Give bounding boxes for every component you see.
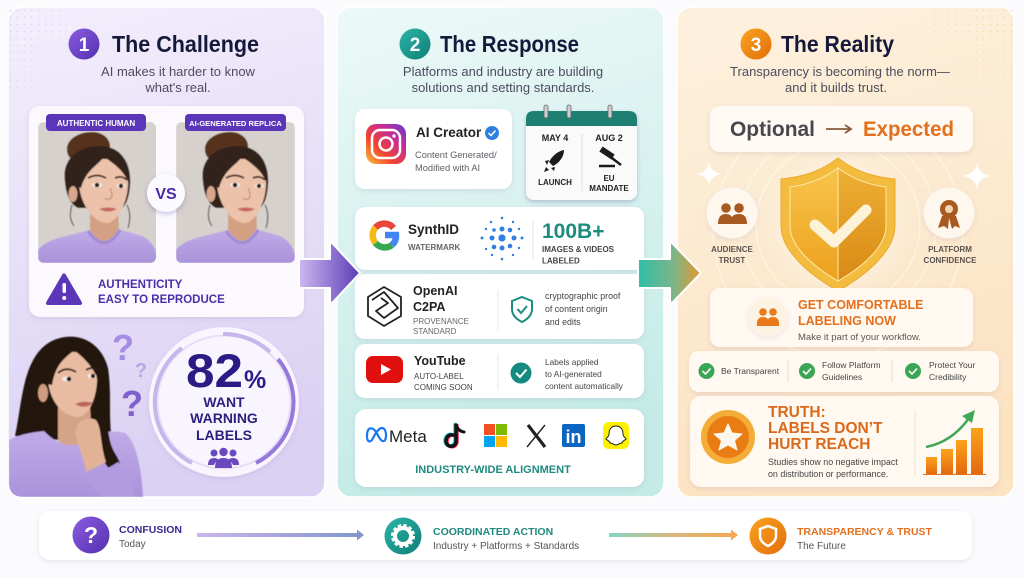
logo: Meta: Meta: [389, 427, 427, 446]
badge: platform confidence: PLATFORM: [928, 245, 972, 254]
illustration: concerned woman: [9, 337, 143, 497]
stat: 82% want warning labels: LABELS: [196, 427, 252, 443]
card: industry logos: INDUSTRY-WIDE ALIGNMENT: [415, 464, 571, 476]
card: get comfortable labeling now: LABELING NOW: [798, 314, 896, 328]
icon: shield: [760, 526, 776, 546]
calendar: key dates: AUG 2: [595, 133, 623, 143]
card: YouTube: [355, 344, 644, 398]
heading: the response: The Response: [440, 31, 579, 57]
icon: golden shield: [781, 158, 895, 291]
icon: teal check: [510, 362, 532, 384]
icon: Google G: [373, 224, 396, 247]
icon: check: [905, 363, 921, 379]
timeline bar: [39, 511, 972, 560]
tag: AI-generated replica: AI-GENERATED REPLICA: [189, 119, 282, 128]
card: Instagram AI creator: AI Creator: [416, 125, 482, 140]
card: action checklist: Follow Platform: [822, 360, 881, 370]
callout: authenticity easy to reproduce: [98, 279, 225, 306]
card: industry logos: [355, 409, 644, 487]
logo: Meta: [367, 427, 427, 446]
icon: Instagram: [366, 124, 406, 164]
subtitle: Transparency is becoming the norm—: [730, 64, 950, 79]
card: Instagram AI creator: Modified with AI: [415, 163, 480, 173]
card: YouTube: Labels applied: [545, 357, 599, 367]
badge: audience trust: TRUST: [719, 256, 745, 265]
card: OpenAI C2PA: and edits: [545, 317, 581, 327]
card: truth labels don't hurt reach: on distribution or performance.: [768, 469, 888, 479]
photo: authentic human: [38, 122, 157, 263]
tag: authentic human: [46, 114, 146, 131]
card: optional to expected: Optional: [730, 118, 815, 141]
card: truth labels don't hurt reach: Studies show no negative impact: [768, 457, 898, 467]
card: truth labels don't hurt reach: TRUTH:: [768, 404, 826, 421]
subtitle: what's real.: [144, 80, 211, 95]
card: Google SynthID: 100B+: [542, 220, 604, 243]
logo: TikTok: [445, 424, 464, 447]
icon: warning triangle: [48, 276, 80, 303]
arrow: confusion to coordinated action: [197, 530, 364, 540]
arrow: response to reality: [638, 243, 701, 303]
card: OpenAI C2PA: [355, 274, 644, 339]
sparkle left: [697, 162, 721, 186]
icon: check: [799, 363, 815, 379]
icon: group of people: [208, 448, 239, 468]
step: transparency and trust: [750, 518, 933, 554]
subtitle: AI makes it harder to know: [101, 64, 256, 79]
heading: the challenge: [68, 28, 259, 60]
heading: the challenge: The Challenge: [112, 31, 259, 57]
panel: the response: [337, 7, 664, 497]
tag: AI-generated replica: [185, 114, 286, 131]
subtitle: [101, 64, 256, 95]
step: transparency and trust: TRANSPARENCY & TRUST: [797, 526, 933, 538]
logo: Microsoft: [484, 424, 507, 447]
icon: star coin: [701, 410, 755, 464]
card: YouTube: content automatically: [545, 381, 624, 391]
card: action checklist: Protect Your: [929, 360, 975, 370]
card: Google SynthID: LABELED: [542, 256, 580, 266]
icon: gear: [392, 526, 414, 546]
badge: platform confidence: [924, 188, 977, 265]
icon: verified badge: [485, 126, 499, 140]
heading: the challenge: 1: [79, 35, 90, 56]
card: truth labels don't hurt reach: [690, 396, 999, 487]
badge: platform confidence: CONFIDENCE: [924, 256, 977, 265]
panel: the challenge: [8, 7, 325, 497]
step: coordinated action: [384, 518, 579, 554]
logo: LinkedIn: in: [566, 427, 582, 447]
subtitle: [730, 64, 950, 95]
card: truth labels don't hurt reach: LABELS DON’T: [768, 420, 883, 437]
icon: question marks: ?: [121, 383, 143, 424]
card: Instagram AI creator: Content Generated/: [415, 150, 497, 160]
card: optional to expected: [710, 106, 973, 152]
subtitle: solutions and setting standards.: [412, 80, 594, 95]
callout: authenticity easy to reproduce: EASY TO REPRODUCE: [98, 294, 225, 306]
stat: 82% want warning labels: %: [244, 366, 266, 394]
step: confusion today: [72, 516, 182, 554]
calendar: key dates: MAY 4: [542, 133, 568, 143]
card: OpenAI C2PA: OpenAI: [413, 284, 457, 298]
card: Google SynthID: SynthID: [408, 222, 459, 237]
badge: audience trust: [706, 188, 758, 265]
card: comparison of authentic and generated portraits: [29, 106, 304, 317]
stat: 82% want warning labels: WANT: [203, 394, 245, 410]
card: OpenAI C2PA: PROVENANCE: [413, 317, 469, 326]
card: get comfortable labeling now: Make it part of your workflow.: [798, 332, 921, 343]
card: OpenAI C2PA: C2PA: [413, 300, 445, 314]
card: Google SynthID: WATERMARK: [408, 243, 461, 252]
step: transparency and trust: The Future: [797, 541, 846, 552]
panel: the reality: [677, 7, 1014, 497]
card: action checklist: Credibility: [929, 372, 967, 382]
sparkle right: [963, 162, 991, 190]
step: confusion today: Today: [119, 539, 146, 550]
icon: teal shield check: [512, 297, 532, 322]
subtitle: Platforms and industry are building: [403, 64, 603, 79]
icon: C2PA hexagon: [368, 287, 401, 326]
shield with trust badges: [697, 107, 991, 357]
photo: AI-generated replica: [176, 122, 295, 263]
badge: VS: [147, 174, 185, 212]
badge: audience trust: AUDIENCE: [711, 245, 754, 254]
card: YouTube: AUTO-LABEL: [414, 372, 464, 381]
callout: authenticity easy to reproduce: AUTHENTICITY: [98, 279, 183, 291]
tag: authentic human: AUTHENTIC HUMAN: [57, 119, 135, 128]
card: OpenAI C2PA: of content origin: [545, 304, 608, 314]
stat: 82% want warning labels: [149, 327, 299, 477]
logo: Snapchat: [603, 422, 629, 449]
arrow: optional to expected: [826, 125, 851, 133]
heading: the reality: [740, 28, 894, 60]
card: action checklist: Be Transparent: [721, 366, 780, 376]
subtitle: [403, 64, 603, 95]
card: get comfortable labeling now: GET COMFORTABLE: [798, 298, 923, 312]
card: YouTube: COMING SOON: [414, 383, 473, 392]
step: coordinated action: COORDINATED ACTION: [433, 526, 553, 538]
card: action checklist: Guidelines: [822, 372, 862, 382]
calendar: key dates: EU: [603, 174, 615, 183]
step: confusion today: ?: [84, 522, 98, 548]
calendar: key dates: [526, 105, 637, 200]
chart: rising bars with arrow: [923, 410, 986, 474]
step: confusion today: CONFUSION: [119, 524, 182, 536]
card: YouTube: YouTube: [414, 354, 466, 368]
icon: gavel: [599, 149, 621, 166]
stat: 82% want warning labels: WARNING: [190, 410, 258, 426]
heading: the reality: The Reality: [781, 31, 894, 57]
calendar: key dates: LAUNCH: [538, 178, 572, 187]
icon: YouTube: [366, 356, 403, 383]
calendar: key dates: MANDATE: [589, 184, 629, 193]
card: YouTube: to AI-generated: [545, 369, 602, 379]
badge: VS: VS: [155, 186, 177, 203]
arrow: challenge to response: [299, 243, 360, 303]
card: OpenAI C2PA: cryptographic proof: [545, 291, 621, 301]
heading: the response: [400, 28, 579, 60]
card: truth labels don't hurt reach: HURT REACH: [768, 436, 870, 453]
logo: X: [527, 425, 545, 447]
card: get comfortable labeling now: [710, 288, 973, 347]
step: coordinated action: Industry + Platforms + Standards: [433, 541, 579, 552]
card: Google SynthID: IMAGES & VIDEOS: [542, 245, 615, 254]
heading: the response: 2: [410, 35, 420, 56]
icon: question marks: ?: [112, 327, 134, 368]
arrow: coordinated action to transparency: [609, 530, 738, 540]
heading: the reality: 3: [751, 35, 761, 56]
card: action checklist: [689, 351, 999, 392]
stat: 82% want warning labels: 82: [186, 344, 243, 397]
icon: people in circle: [748, 298, 788, 336]
card: OpenAI C2PA: STANDARD: [413, 327, 457, 336]
logo: LinkedIn: [562, 424, 585, 447]
icon: check: [698, 363, 714, 379]
icon: question marks: ?: [135, 360, 147, 382]
subtitle: and it builds trust.: [785, 80, 887, 95]
card: optional to expected: Expected: [863, 118, 954, 141]
icon: rocket: [544, 150, 564, 172]
card: Instagram AI creator: [355, 109, 512, 189]
icon: question marks: [112, 327, 147, 424]
icon: watermark dot pattern: [480, 217, 524, 260]
card: Google SynthID: [355, 207, 644, 270]
